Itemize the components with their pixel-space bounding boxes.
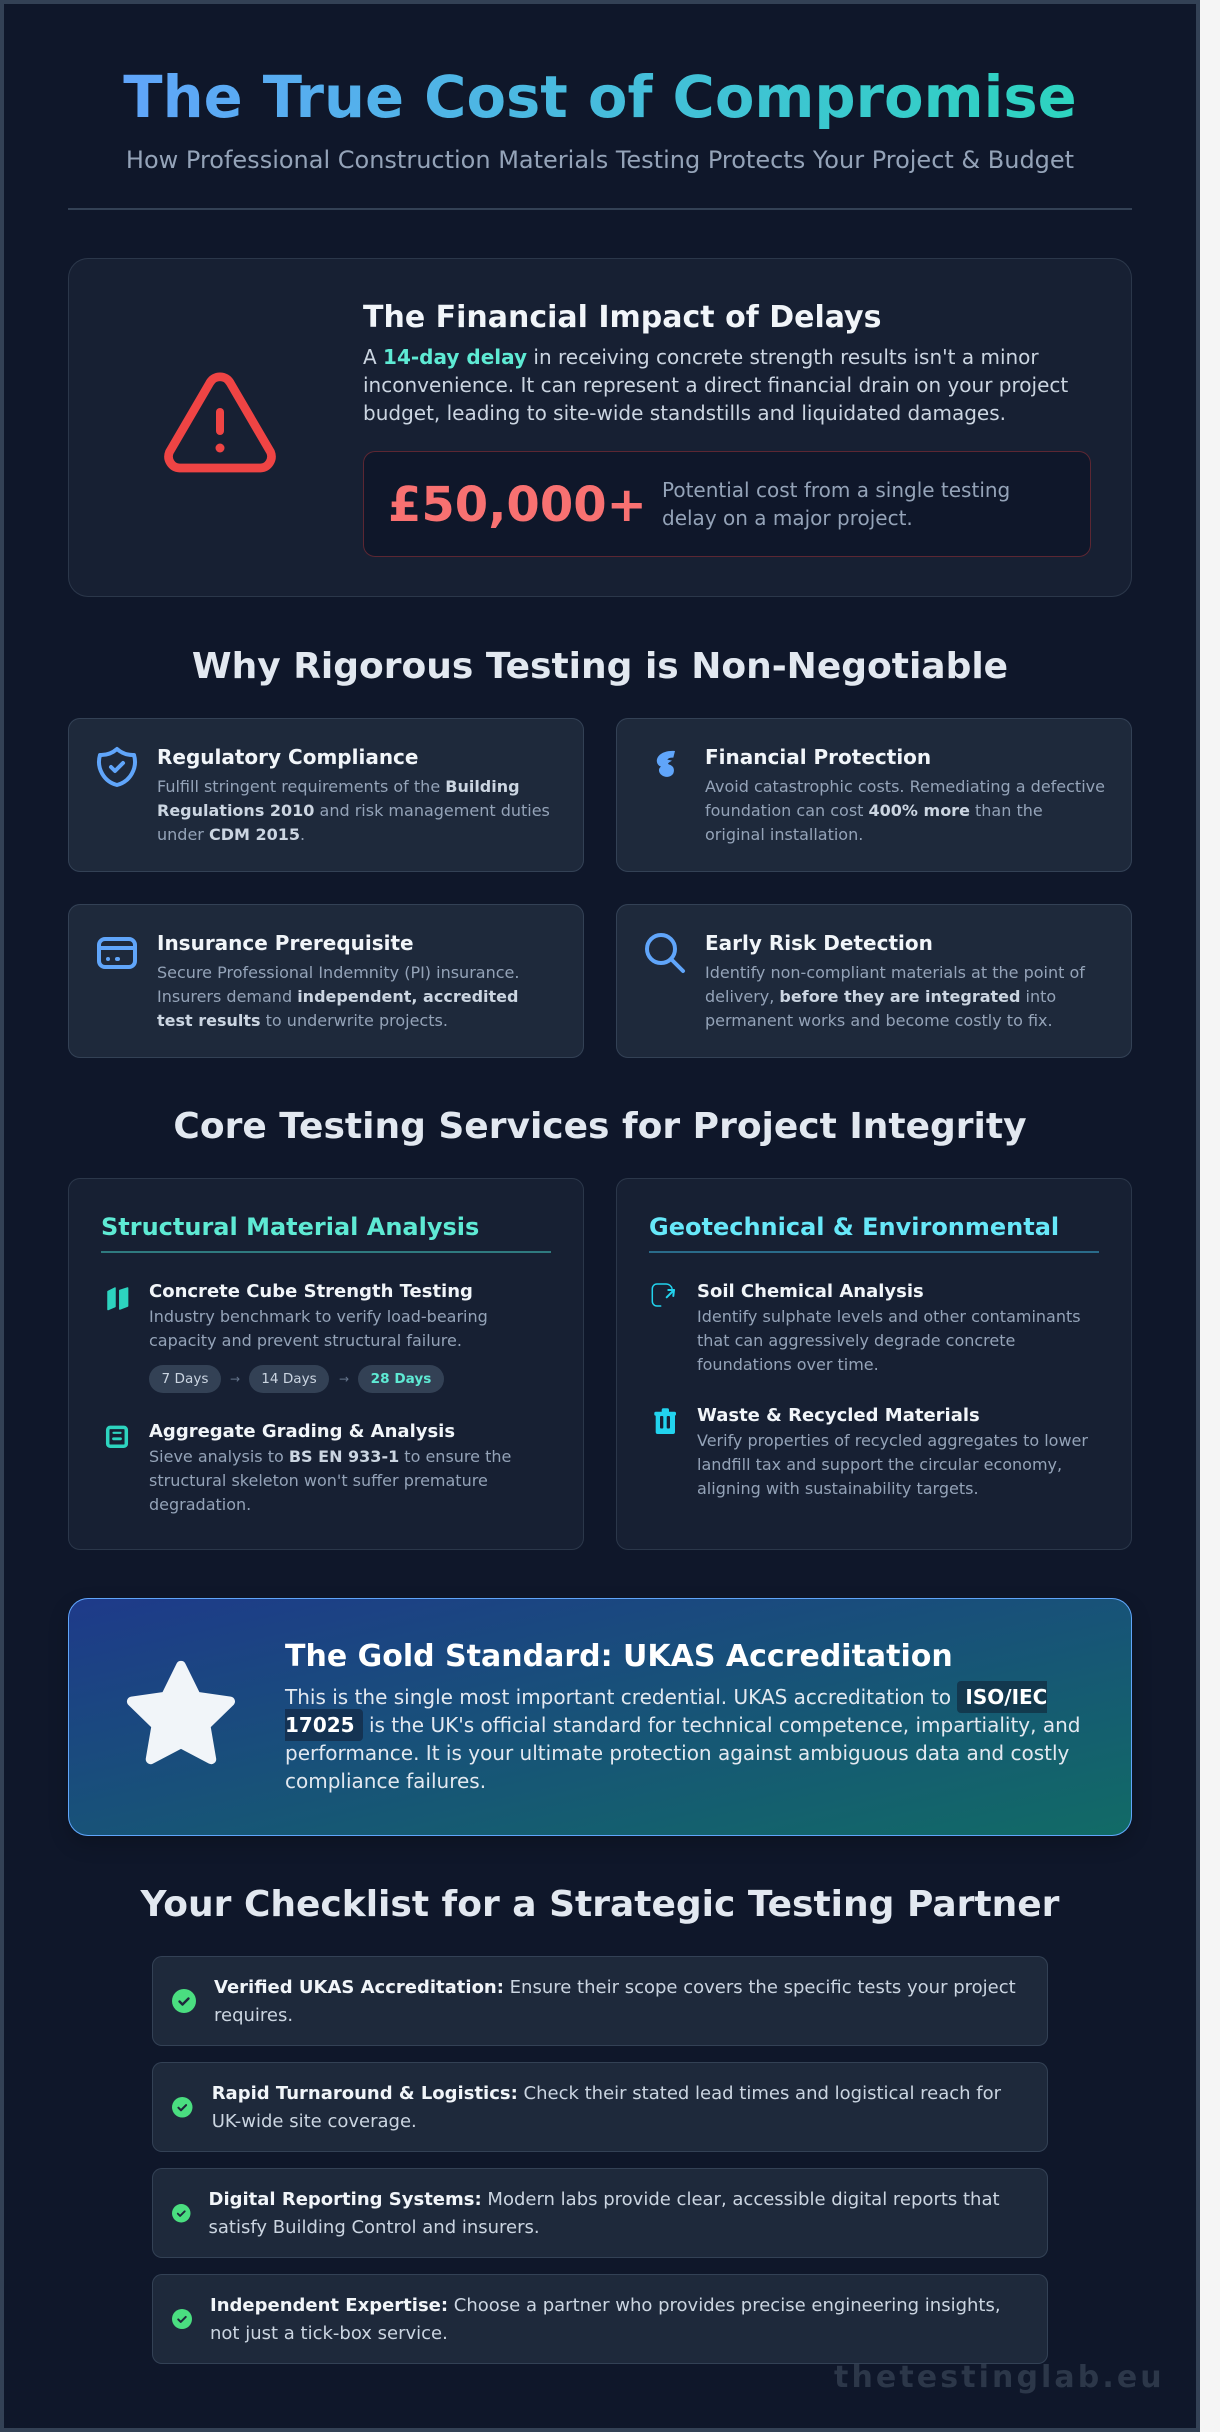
- card text: original installation.: [705, 824, 863, 844]
- icon: check: [172, 2204, 190, 2222]
- service text: landfill tax and support the circular economy,: [697, 1454, 1062, 1474]
- card text: Fulfill stringent requirements of the Building: [157, 776, 520, 796]
- item text: UK-wide site coverage.: [212, 2111, 417, 2132]
- service text: foundations over time.: [697, 1354, 879, 1374]
- checklist item: independent expertise: [152, 2274, 1048, 2364]
- timeline pills: [149, 1365, 444, 1393]
- card text: delivery, before they are integrated into: [705, 986, 1056, 1006]
- heading: why testing: Why Rigorous Testing is Non-Negotiable: [192, 646, 1008, 686]
- item text: not just a tick-box service.: [210, 2323, 448, 2344]
- pill: 28 days: [358, 1365, 444, 1393]
- icon: check: [172, 2097, 192, 2118]
- service text: degradation.: [149, 1494, 251, 1514]
- card text: Regulations 2010 and risk management duties: [157, 800, 550, 820]
- checklist item: turnaround: [152, 2062, 1048, 2152]
- arrow: →: [230, 1372, 240, 1386]
- service text: [149, 1446, 511, 1514]
- arrow: →: [339, 1372, 349, 1386]
- heading: financial impact: The Financial Impact of Delays: [363, 300, 881, 335]
- checklist item: digital reporting: [152, 2168, 1048, 2258]
- item text: [214, 1977, 1016, 2026]
- card text: foundation can cost 400% more than the: [705, 800, 1043, 820]
- icon: soil export: [652, 1283, 675, 1307]
- card text: Secure Professional Indemnity (PI) insurance.: [157, 962, 519, 982]
- card title: Insurance Prerequisite: [157, 931, 414, 955]
- card title: Financial Protection: [705, 745, 931, 769]
- service text: structural skeleton won't suffer premature: [149, 1470, 488, 1490]
- card text: test results to underwrite projects.: [157, 1010, 448, 1030]
- UKAS heading: The Gold Standard: UKAS Accreditation: [285, 1639, 953, 1674]
- item text: Independent Expertise: Choose a partner who provides precise engineering insights,: [210, 2295, 1001, 2316]
- pill: 14 days: 14 Days: [261, 1371, 317, 1387]
- UKAS text: [284, 1681, 1080, 1792]
- service title: Waste & Recycled Materials: [697, 1405, 980, 1426]
- card text: [157, 776, 550, 844]
- stat description: [662, 478, 1010, 530]
- icon: shield check: [96, 746, 138, 787]
- service title: Concrete Cube Strength Testing: [149, 1281, 473, 1302]
- card: insurance prerequisite: [68, 904, 584, 1058]
- icon: star: [126, 1660, 235, 1764]
- text: delay explanation: A 14-day delay in receiving concrete strength results isn't a minor: [363, 345, 1039, 369]
- panel: geotechnical and environmental: [616, 1178, 1132, 1550]
- pill: 7 days: [149, 1365, 221, 1393]
- icon: warning triangle: [164, 372, 276, 472]
- pill: 7 days: 7 Days: [162, 1371, 208, 1387]
- service text: capacity and prevent structural failure.: [149, 1330, 462, 1350]
- card title: Regulatory Compliance: [157, 745, 418, 769]
- item text: Rapid Turnaround & Logistics: Check their stated lead times and logistical reach for: [212, 2083, 1001, 2104]
- service text: that can aggressively degrade concrete: [697, 1330, 1015, 1350]
- callout: cost stat: [363, 451, 1091, 557]
- card text: [705, 776, 1105, 844]
- stat description: Potential cost from a single testing: [662, 478, 1010, 502]
- UKAS text: performance. It is your ultimate protection against ambiguous data and costly: [285, 1740, 1069, 1764]
- card text: Insurers demand independent, accredited: [157, 986, 518, 1006]
- icon: magnifier: [645, 933, 686, 974]
- icon: check: [172, 2309, 192, 2329]
- checklist item: UKAS: [152, 1956, 1048, 2046]
- service: concrete cube testing: [107, 1281, 488, 1393]
- card text: [157, 962, 519, 1030]
- panel: UKAS accreditation: [68, 1598, 1132, 1836]
- title: The True Cost of Compromise: [123, 64, 1077, 131]
- service: aggregate grading: [106, 1421, 511, 1514]
- card text: Avoid catastrophic costs. Remediating a defective: [705, 776, 1105, 796]
- heading: core services: Core Testing Services for Project Integrity: [173, 1106, 1027, 1146]
- item text: [210, 2295, 1001, 2344]
- icon: concrete panels: [107, 1287, 128, 1310]
- card text: [705, 962, 1086, 1030]
- panel heading: Structural Material Analysis: [101, 1213, 479, 1241]
- service text: Verify properties of recycled aggregates to lower: [697, 1430, 1088, 1450]
- item text: requires.: [214, 2005, 293, 2026]
- service text: [149, 1306, 488, 1350]
- service: soil chemical analysis: [652, 1281, 1081, 1374]
- item text: [208, 2189, 1000, 2238]
- item text: [212, 2083, 1001, 2132]
- card text: Identify non-compliant materials at the point of: [705, 962, 1085, 982]
- service text: aligning with sustainability targets.: [697, 1478, 979, 1498]
- icon: check: [172, 1989, 196, 2013]
- service: waste and recycled materials: [654, 1405, 1088, 1498]
- service text: Industry benchmark to verify load-bearing: [149, 1306, 488, 1326]
- subtitle: How Professional Construction Materials Testing Protects Your Project & Budget: [126, 146, 1074, 174]
- card: financial protection: [616, 718, 1132, 872]
- service text: Sieve analysis to BS EN 933-1 to ensure the: [149, 1446, 511, 1466]
- icon: trash bin: [654, 1408, 676, 1434]
- text: delay explanation: inconvenience. It can represent a direct financial drain on your project: [363, 373, 1068, 397]
- stat description: delay on a major project.: [662, 506, 913, 530]
- card text: under CDM 2015.: [157, 824, 305, 844]
- card: early risk detection: [616, 904, 1132, 1058]
- service title: Soil Chemical Analysis: [697, 1281, 924, 1302]
- card title: Early Risk Detection: [705, 931, 933, 955]
- service title: Aggregate Grading & Analysis: [149, 1421, 455, 1442]
- item text: satisfy Building Control and insurers.: [208, 2217, 540, 2238]
- item text: Digital Reporting Systems: Modern labs provide clear, accessible digital reports that: [208, 2189, 1000, 2210]
- UKAS text: compliance failures.: [285, 1768, 486, 1792]
- UKAS text: 17025 is the UK's official standard for technical competence, impartiality, and: [285, 1712, 1080, 1736]
- panel: structural material analysis: [68, 1178, 584, 1550]
- text: delay explanation: budget, leading to site-wide standstills and liquidated damages.: [363, 401, 1006, 425]
- icon: currency: [656, 750, 675, 777]
- icon: credit card: [97, 937, 137, 969]
- text: delay explanation: [363, 345, 1068, 425]
- panel heading: Geotechnical & Environmental: [649, 1213, 1059, 1241]
- service text: [697, 1306, 1081, 1374]
- pill: 14 days: [249, 1365, 329, 1393]
- heading: checklist: Your Checklist for a Strategic Testing Partner: [141, 1884, 1059, 1924]
- item text: Verified UKAS Accreditation: Ensure their scope covers the specific tests your project: [214, 1977, 1016, 1998]
- service text: [697, 1430, 1088, 1498]
- icon: grading box: [106, 1426, 128, 1448]
- UKAS text: This is the single most important credential. UKAS accreditation to ISO/IEC: [285, 1684, 1047, 1708]
- watermark: thetestinglab.eu: [834, 2360, 1165, 2394]
- service text: Identify sulphate levels and other contaminants: [697, 1306, 1081, 1326]
- stat number: £50,000+: [388, 477, 647, 533]
- card: regulatory compliance: [68, 718, 584, 872]
- pill: 28 days: 28 Days: [371, 1371, 431, 1387]
- card text: permanent works and become costly to fix.: [705, 1010, 1053, 1030]
- panel: financial impact: [68, 258, 1132, 597]
